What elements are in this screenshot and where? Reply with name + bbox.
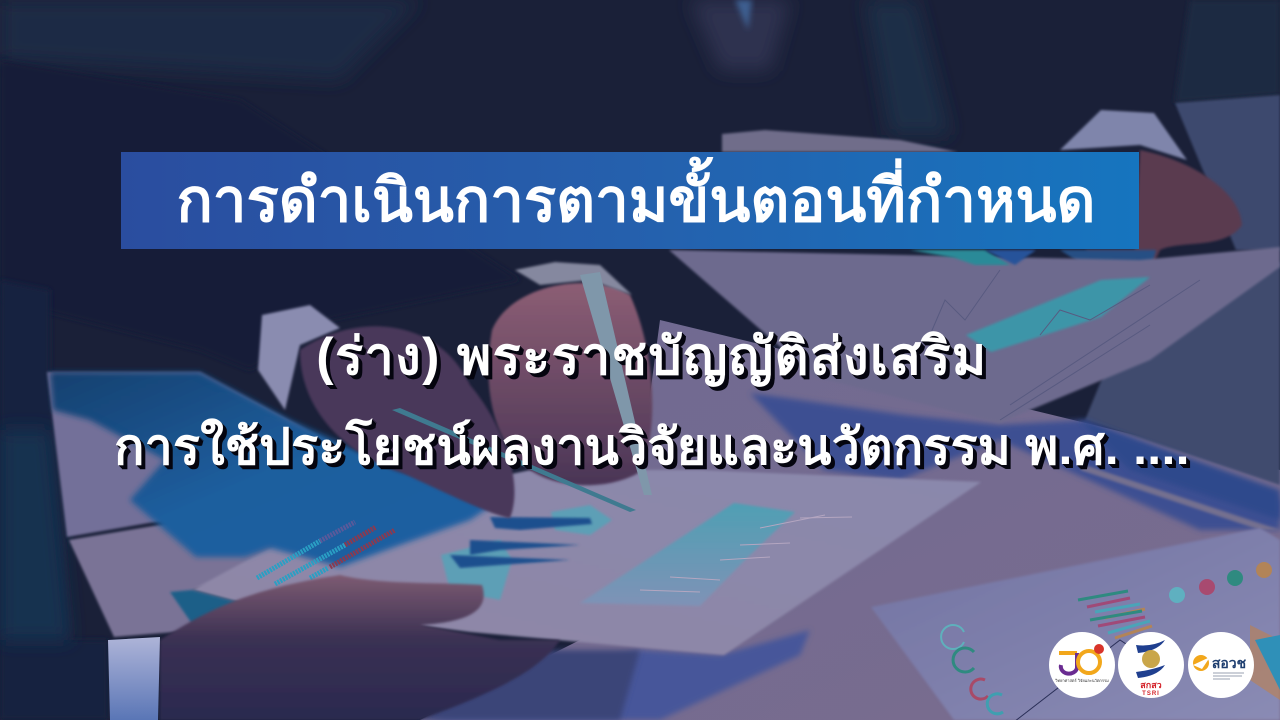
center line chart	[580, 503, 795, 606]
grey device top right	[1175, 95, 1280, 250]
left note pages	[47, 372, 400, 537]
blue shadows on table	[750, 393, 1280, 530]
partner logos	[1049, 632, 1254, 698]
subtitle line 1: (ร่าง) พระราชบัญญัติส่งเสริม	[316, 328, 988, 386]
bottom hand	[160, 575, 560, 720]
bar dashes on center paper	[257, 522, 395, 584]
right cuff and hand	[1060, 110, 1187, 160]
center cuff and hands	[258, 305, 340, 410]
table and wood	[420, 320, 1280, 720]
right paper with chart	[669, 247, 1280, 423]
logo: NXPO	[1188, 632, 1254, 698]
logo: 20 years anniversary	[1049, 632, 1115, 698]
bottom cuff	[108, 637, 160, 720]
logo: TSRI	[1118, 632, 1184, 698]
subtitle line 2: การใช้ประโยชน์ผลงานวิจัยและนวัตกรรม พ.ศ. ....	[114, 419, 1190, 475]
pens	[580, 272, 652, 495]
open book	[722, 130, 958, 152]
logo: TSRI: สกสว	[1140, 680, 1162, 690]
finger shadows and map on center paper	[441, 540, 512, 600]
title banner	[121, 152, 1139, 249]
logo: NXPO: สอวช	[1212, 655, 1247, 671]
logo: 20 years anniversary: วิทยาศาสตร์ วิจัยและนวัตกรรม	[1054, 678, 1109, 683]
logo: TSRI: TSRI	[1142, 691, 1160, 697]
blue cast shadow	[50, 372, 500, 567]
title banner: การดำเนินการตามขั้นตอนที่กำหนด	[176, 167, 1096, 234]
bottom right paper	[871, 528, 1280, 720]
top suits	[0, 0, 420, 80]
center paper	[192, 470, 981, 655]
left suit sleeve	[0, 60, 520, 370]
